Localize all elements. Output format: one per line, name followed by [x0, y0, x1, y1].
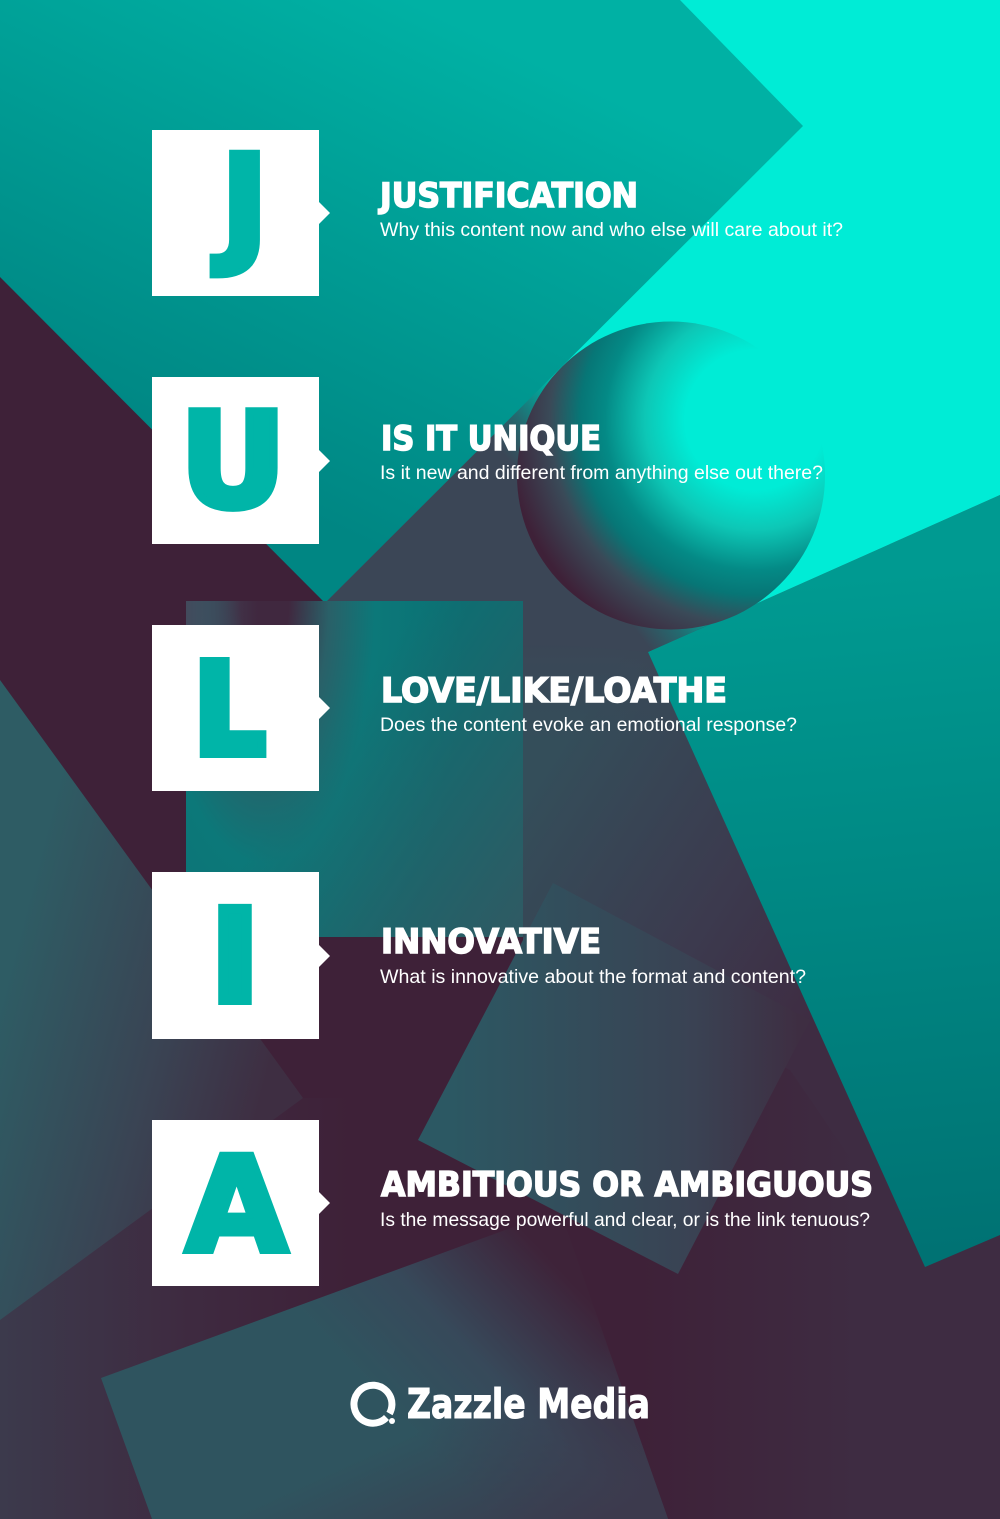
heading and text: is it unique: IS IT UNIQUE: [381, 419, 601, 458]
heading and text: ambitious or ambiguous: AMBITIOUS OR AMBIGUOUS: [381, 1165, 873, 1204]
card: L: [152, 625, 330, 791]
heading and text: innovative: What is innovative about the format and content?: [380, 966, 806, 988]
heading and text: justification: Why this content now and who else will care about it?: [380, 219, 843, 241]
heading and text: love like loathe: [380, 671, 797, 736]
sphere: [517, 322, 825, 630]
card: U: [152, 377, 330, 544]
card: U: U: [180, 385, 286, 537]
heading and text: is it unique: [380, 419, 823, 484]
card: L: L: [194, 638, 265, 783]
heading and text: ambitious or ambiguous: [380, 1165, 873, 1231]
heading and text: innovative: INNOVATIVE: [381, 922, 601, 961]
heading and text: love like loathe: Does the content evoke an emotional response?: [380, 714, 797, 736]
heading and text: justification: JUSTIFICATION: [378, 176, 638, 215]
card: J: [152, 127, 330, 296]
card: A: A: [186, 1129, 288, 1283]
heading and text: love like loathe: LOVE/LIKE/LOATHE: [381, 671, 727, 710]
card: I: I: [212, 885, 258, 1030]
heading and text: is it unique: Is it new and different from anything else out there?: [380, 462, 823, 484]
logo: Zazzle Media: [354, 1380, 650, 1428]
logo: Zazzle Media: Zazzle Media: [407, 1380, 650, 1428]
card: I: [152, 872, 330, 1039]
heading and text: innovative: [380, 922, 806, 988]
card: J: J: [212, 127, 269, 281]
heading and text: ambitious or ambiguous: Is the message powerful and clear, or is the link tenuous?: [380, 1209, 870, 1231]
card: A: [152, 1120, 330, 1286]
heading and text: justification: [378, 176, 843, 241]
